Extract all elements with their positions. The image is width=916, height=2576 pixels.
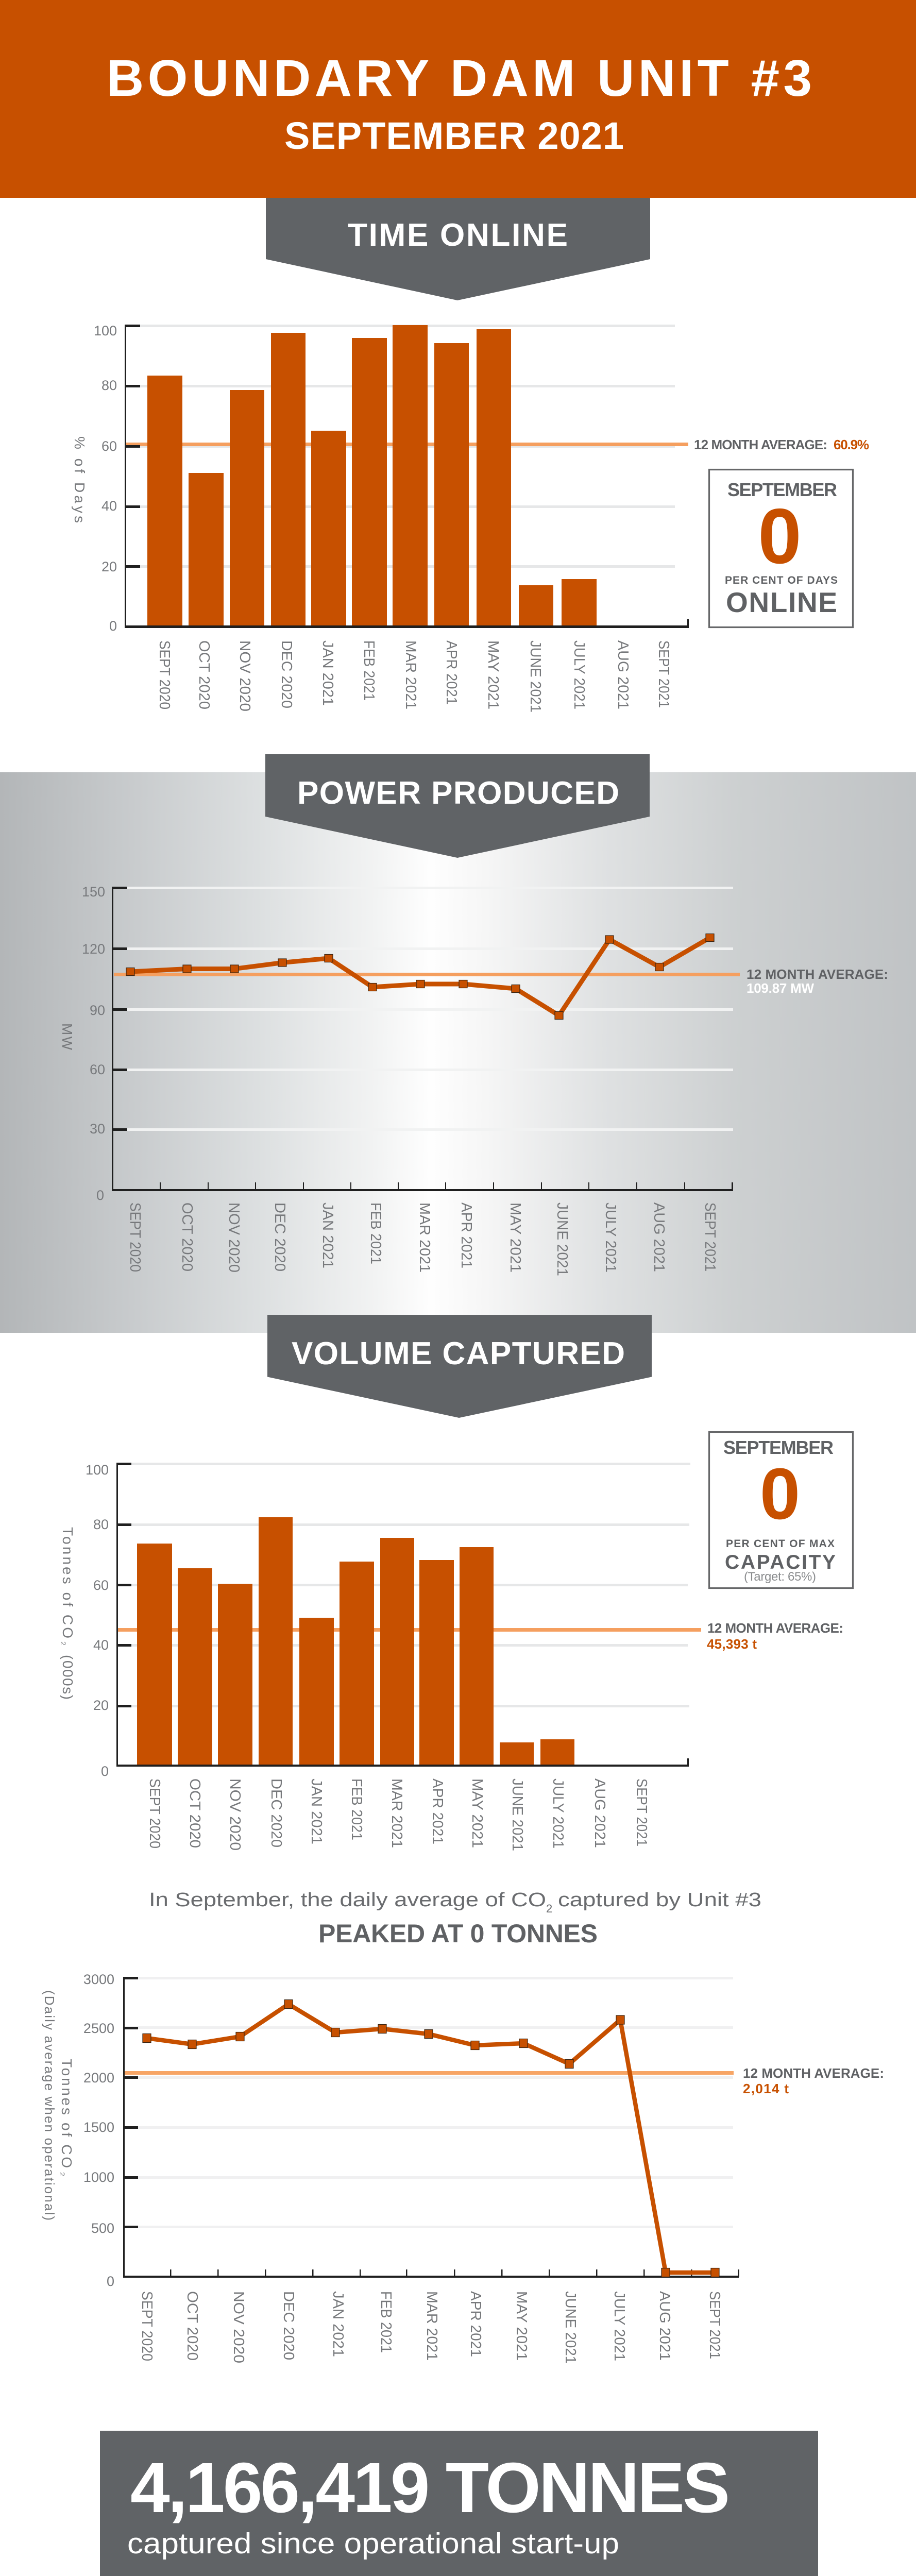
x axis labels: JAN 2021: [319, 1202, 336, 1268]
x axis labels: DEC 2020: [272, 1202, 288, 1272]
12 month average label: 12 MONTH AVERAGE:: [707, 1620, 843, 1636]
x axis labels: APR 2021: [467, 2291, 484, 2357]
x axis labels: OCT 2020: [186, 1778, 203, 1848]
callout: september time online: PER CENT OF DAYS: [725, 574, 838, 586]
x axis labels: FEB 2021: [348, 1778, 365, 1840]
y axis: [94, 323, 140, 634]
y axis: [83, 1972, 138, 2289]
x axis labels: DEC 2020: [268, 1778, 284, 1848]
y axis: [86, 1462, 131, 1779]
y axis title: Tonnes of CO: [60, 1527, 76, 1638]
x axis labels: SEPT 2020: [146, 1778, 163, 1849]
x axis labels: NOV 2020: [236, 640, 253, 711]
x axis labels: APR 2021: [429, 1778, 446, 1844]
text block: daily average intro: [149, 1889, 761, 1915]
text block: daily average intro: captured by Unit #3: [558, 1889, 761, 1911]
x axis labels: AUG 2021: [651, 1202, 667, 1272]
x axis labels: SEPT 2021: [702, 1202, 718, 1272]
callout: september capacity: SEPTEMBER: [723, 1437, 834, 1458]
x axis labels: JUNE 2021: [554, 1202, 570, 1276]
x axis labels: MAR 2021: [416, 1202, 433, 1273]
callout: september capacity: PER CENT OF MAX: [726, 1538, 835, 1550]
y axis: 500: [91, 2221, 114, 2236]
callout: september time online: ONLINE: [726, 586, 837, 618]
12 month average label: 12 MONTH AVERAGE:: [694, 437, 827, 452]
x axis labels: MAR 2021: [402, 640, 419, 709]
x axis labels: NOV 2020: [227, 1778, 243, 1851]
panel: time online bar chart: [72, 323, 869, 713]
y axis: 60: [93, 1578, 109, 1593]
x axis labels: FEB 2021: [361, 640, 377, 701]
x axis labels: SEPT 2020: [139, 2291, 155, 2361]
y axis title: Tonnes of CO: [59, 2059, 75, 2168]
callout: september capacity: [709, 1432, 853, 1588]
12 month average label: 2,014 t: [743, 2081, 789, 2096]
x axis labels: AUG 2021: [615, 640, 631, 709]
x axis labels: AUG 2021: [591, 1778, 608, 1848]
heading: volume captured: VOLUME CAPTURED: [292, 1336, 625, 1371]
y axis: 20: [101, 559, 117, 574]
x axis labels: [156, 640, 672, 713]
text block: daily average intro: In September, the daily average of CO: [149, 1889, 546, 1911]
12 month average label: 12 MONTH AVERAGE:: [743, 2065, 884, 2081]
12 month average label: [743, 2065, 884, 2096]
panel: power produced line chart: [59, 884, 888, 1276]
y axis: 100: [94, 323, 117, 338]
x axis labels: DEC 2020: [278, 640, 295, 708]
x axis labels: JUNE 2021: [509, 1778, 525, 1851]
y axis: 120: [82, 941, 105, 957]
x axis labels: NOV 2020: [230, 2291, 247, 2363]
y axis title: [42, 1990, 75, 2221]
12 month average label: 12 MONTH AVERAGE:: [747, 967, 888, 982]
x axis: [125, 619, 689, 628]
y axis: 2000: [83, 2070, 114, 2086]
x axis labels: APR 2021: [443, 640, 460, 705]
12 month average label: 60.9%: [834, 437, 869, 452]
x axis labels: OCT 2020: [196, 640, 212, 709]
heading: power produced: [265, 754, 650, 858]
y axis: 1500: [83, 2120, 114, 2135]
data line: [147, 2004, 715, 2273]
x axis labels: FEB 2021: [367, 1202, 384, 1264]
bars: [137, 1517, 574, 1765]
y axis title: 2: [58, 2172, 66, 2176]
x axis: [123, 2269, 739, 2278]
x axis labels: MAR 2021: [388, 1778, 405, 1848]
x axis labels: MAY 2021: [513, 2291, 530, 2361]
x axis labels: SEPT 2021: [706, 2291, 723, 2359]
y axis: 150: [82, 884, 105, 900]
x axis: [116, 1758, 689, 1767]
x axis labels: OCT 2020: [179, 1202, 195, 1272]
x axis labels: MAY 2021: [507, 1202, 523, 1273]
x axis labels: JAN 2021: [330, 2291, 346, 2357]
y axis: 60: [101, 438, 117, 454]
callout: september capacity: CAPACITY: [725, 1551, 836, 1573]
y axis: 2500: [83, 2021, 114, 2036]
subtitle: SEPTEMBER 2021: [284, 114, 624, 157]
y axis: 100: [86, 1462, 109, 1478]
header: [0, 0, 916, 198]
y axis: 3000: [83, 1972, 114, 1987]
panel: power produced background: [0, 772, 916, 1333]
x axis labels: SEPT 2020: [127, 1202, 143, 1272]
heading: time online: TIME ONLINE: [348, 217, 568, 253]
y axis: 40: [101, 498, 117, 514]
bars: [147, 325, 597, 626]
title: BOUNDARY DAM UNIT #3: [107, 49, 812, 107]
y axis: 20: [93, 1698, 109, 1713]
x axis labels: NOV 2020: [226, 1202, 242, 1273]
x axis labels: JULY 2021: [611, 2291, 627, 2361]
callout: september time online: SEPTEMBER: [727, 479, 837, 500]
heading: power produced: POWER PRODUCED: [297, 775, 619, 811]
x axis labels: SEPT 2021: [655, 640, 672, 708]
callout: september time online: 0: [758, 493, 802, 580]
x axis labels: MAR 2021: [423, 2291, 440, 2361]
x axis labels: SEPT 2021: [633, 1778, 650, 1846]
y axis: 80: [101, 378, 117, 393]
text block: daily average intro: 2: [546, 1902, 552, 1915]
caption: captured since operational start-up: [127, 2527, 619, 2560]
x axis labels: JAN 2021: [308, 1778, 325, 1844]
callout: september capacity: 0: [760, 1453, 800, 1534]
callout: september capacity: (Target: 65%): [744, 1570, 816, 1584]
x axis labels: FEB 2021: [378, 2291, 394, 2353]
x axis labels: JUNE 2021: [527, 640, 544, 713]
total tonnes: 4,166,419 TONNES: [130, 2448, 730, 2528]
x axis labels: SEPT 2020: [156, 640, 173, 709]
x axis labels: JUNE 2021: [562, 2291, 579, 2364]
y axis: 0: [109, 618, 117, 634]
y axis: 30: [90, 1121, 105, 1137]
x axis labels: JULY 2021: [571, 640, 587, 709]
heading: peaked at 0 tonnes: PEAKED AT 0 TONNES: [318, 1919, 598, 1948]
x axis labels: JULY 2021: [550, 1778, 566, 1849]
x axis labels: JAN 2021: [319, 640, 336, 706]
x axis labels: [139, 2291, 723, 2364]
panel: volume captured bar chart: [59, 1462, 843, 1851]
y axis title: (000s): [60, 1655, 76, 1700]
y axis title: (Daily average when operational): [42, 1990, 57, 2221]
y axis: 0: [101, 1764, 109, 1779]
x axis labels: [146, 1778, 650, 1851]
y axis: 0: [96, 1188, 104, 1203]
y axis: 60: [90, 1062, 105, 1077]
x axis labels: MAY 2021: [469, 1778, 485, 1848]
y axis title: % of Days: [72, 436, 88, 523]
data markers: [126, 934, 714, 1019]
y axis title: 2: [59, 1641, 67, 1646]
12 month average label: 45,393 t: [707, 1636, 757, 1652]
x axis labels: APR 2021: [458, 1202, 474, 1268]
y axis: [82, 884, 127, 1203]
data line: [130, 938, 710, 1015]
panel: daily average line chart: [42, 1972, 884, 2364]
x axis labels: JULY 2021: [602, 1202, 619, 1273]
12 month average label: [707, 1620, 843, 1652]
heading: time online: [266, 198, 650, 300]
x axis labels: DEC 2020: [280, 2291, 297, 2360]
y axis title: MW: [59, 1023, 75, 1050]
y axis: 0: [107, 2274, 114, 2289]
y axis: 80: [93, 1517, 109, 1532]
x axis labels: AUG 2021: [656, 2291, 673, 2361]
x axis labels: MAY 2021: [485, 640, 501, 709]
y axis: 1000: [83, 2170, 114, 2185]
12 month average label: 109.87 MW: [747, 980, 814, 996]
y axis: 40: [93, 1637, 109, 1653]
data markers: [143, 2000, 719, 2277]
x axis: [112, 1182, 733, 1191]
x axis labels: OCT 2020: [184, 2291, 200, 2361]
x axis labels: [127, 1202, 718, 1276]
12 month average label: [747, 967, 888, 996]
y axis title: [59, 1527, 76, 1700]
panel: total captured: [100, 2431, 818, 2576]
heading: volume captured: [267, 1315, 652, 1418]
y axis: 90: [90, 1003, 105, 1018]
callout: september time online: [709, 470, 853, 628]
